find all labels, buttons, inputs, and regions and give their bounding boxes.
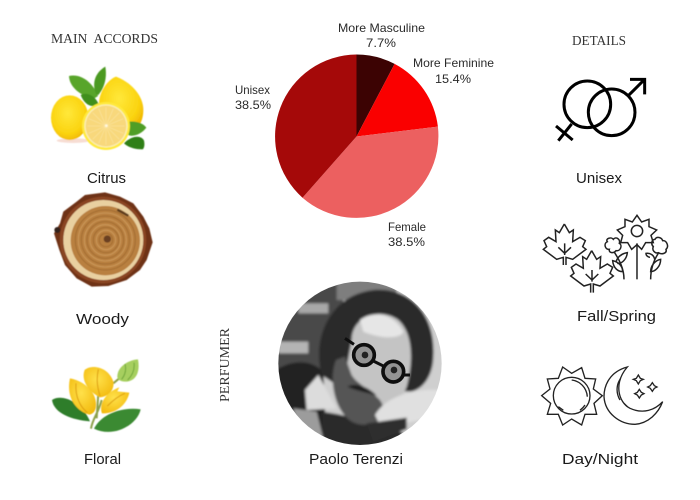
icon: woody log slice (54, 192, 153, 287)
slice: more feminine 15.4% (356, 64, 438, 136)
pie chart: gender split (235, 21, 494, 249)
icon: maple leaves and flowers (543, 215, 667, 293)
panel: details column (542, 79, 667, 468)
slice: female 38.5% (302, 127, 438, 218)
label: more masculine: More Masculine (338, 21, 425, 35)
label: female: Female (388, 220, 426, 234)
icon: citrus lemons (51, 67, 146, 150)
icon: sun and moon (542, 367, 663, 425)
label: day/night: Day/Night (562, 451, 639, 468)
value: more masculine: 7.7% (366, 36, 396, 50)
slice: unisex 38.5% (275, 54, 356, 198)
portrait: paolo terenzi (278, 282, 442, 445)
label: unisex: Unisex (235, 83, 270, 97)
label: woody: Woody (76, 311, 130, 328)
label: floral: Floral (84, 451, 121, 468)
label: perfumer name: Paolo Terenzi (309, 451, 403, 468)
label: more feminine: More Feminine (413, 56, 494, 70)
heading: perfumer vertical: PERFUMER (217, 328, 232, 402)
value: more feminine: 15.4% (435, 72, 471, 86)
heading: main accords: MAIN ACCORDS (51, 31, 158, 46)
label: fall/spring: Fall/Spring (577, 308, 656, 325)
label: citrus: Citrus (87, 170, 126, 187)
slice: more masculine 7.7% (356, 54, 395, 136)
icon: floral yellow blossoms (52, 359, 141, 432)
heading: details: DETAILS (572, 33, 626, 48)
icon: gender symbols (556, 79, 645, 141)
panel: main accords column (51, 67, 153, 468)
label: unisex: Unisex (576, 170, 622, 187)
value: female: 38.5% (388, 235, 425, 249)
value: unisex: 38.5% (235, 98, 271, 112)
infographic canvas (50, 24, 668, 467)
